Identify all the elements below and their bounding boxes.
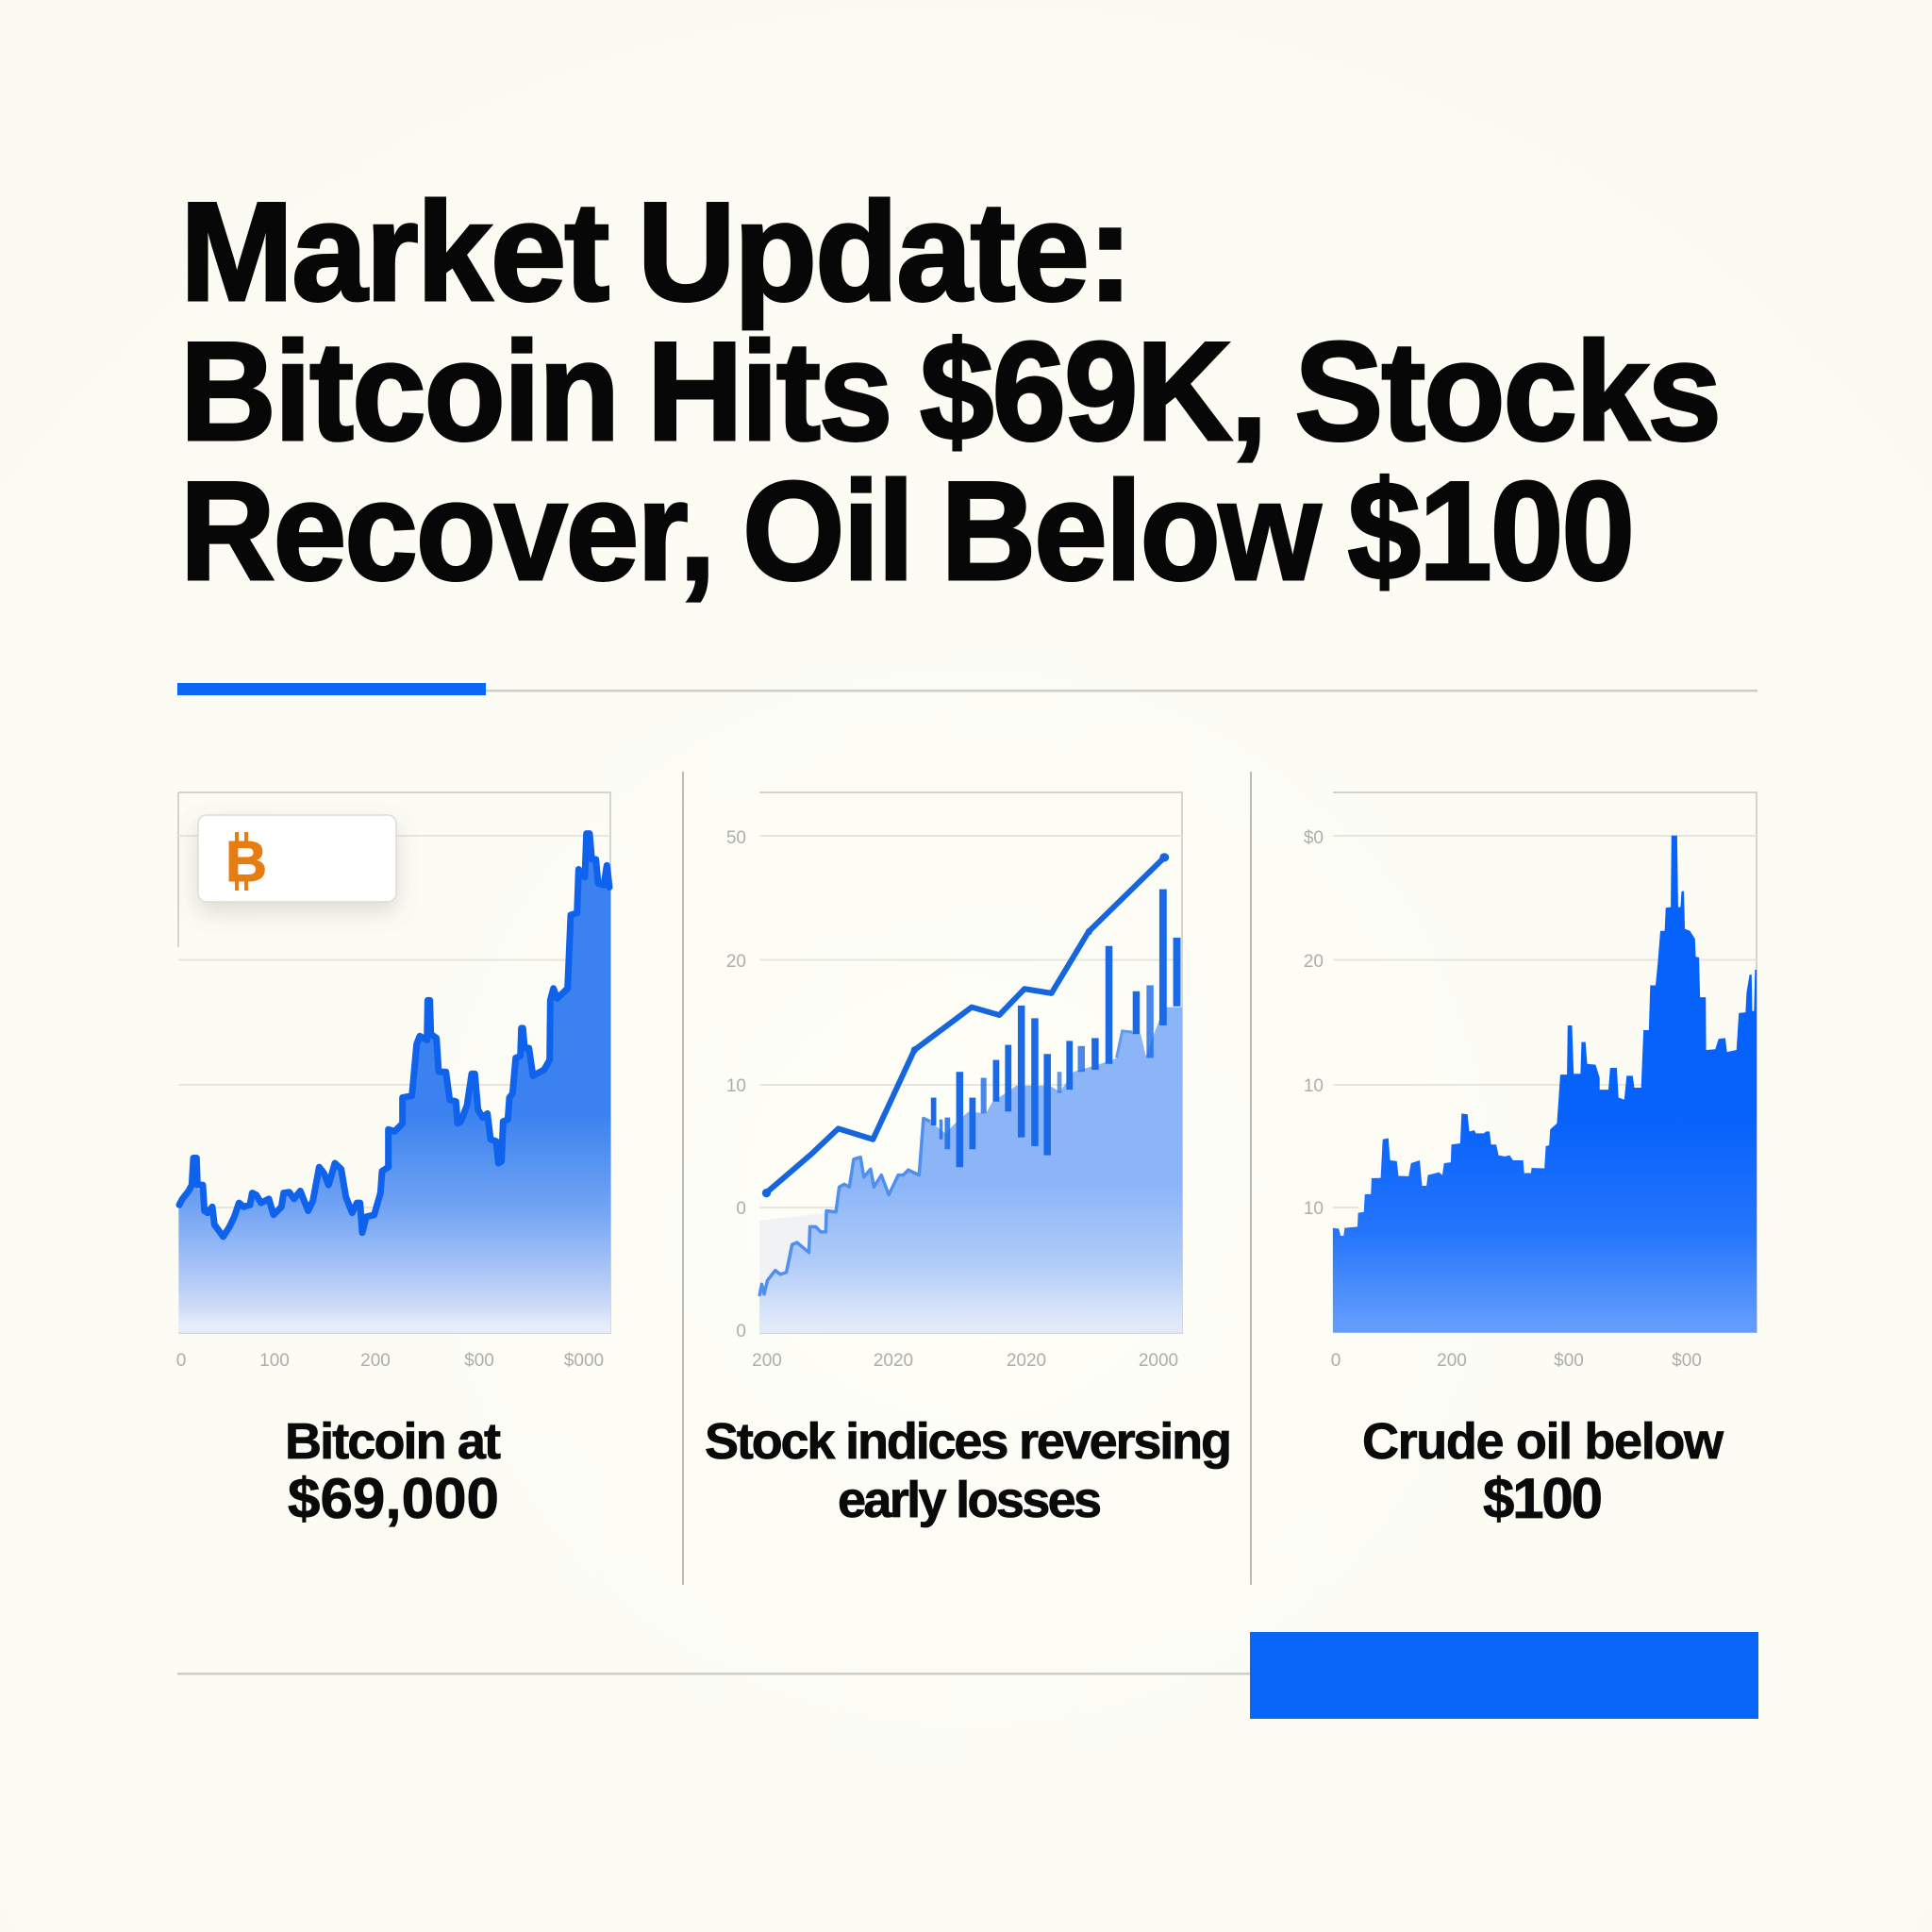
- x axis labels: bitcoin: $00: [464, 1351, 494, 1371]
- caption: oil: Crude oil below: [1362, 1413, 1724, 1470]
- y axis labels: stocks: 20: [726, 952, 746, 972]
- chart frame and grid: stocks: [759, 792, 1182, 1333]
- x axis labels: stocks: 2020: [874, 1351, 913, 1371]
- caption: bitcoin: Bitcoin at: [285, 1413, 501, 1470]
- title: Recover, Oil Below $100: [180, 452, 1633, 609]
- y axis labels: oil: 10: [1304, 1199, 1324, 1219]
- x axis labels: stocks: 200: [752, 1351, 782, 1371]
- y axis labels: oil: 10: [1304, 1076, 1324, 1096]
- area chart: bitcoin price: [178, 834, 610, 1333]
- panel: bitcoin chart: [176, 792, 610, 1530]
- trend line: stocks: [762, 853, 1169, 1197]
- x axis labels: bitcoin: [176, 1351, 604, 1371]
- top rule with blue accent: [177, 683, 1757, 695]
- x axis labels: oil: 200: [1437, 1351, 1467, 1371]
- x axis labels: stocks: 2000: [1139, 1351, 1178, 1371]
- y axis labels: oil: [1304, 828, 1324, 1219]
- x axis labels: bitcoin: 0: [176, 1351, 186, 1371]
- y axis labels: stocks: 0: [736, 1199, 746, 1219]
- title: [180, 173, 1720, 609]
- title: Bitcoin Hits $69K, Stocks: [180, 312, 1720, 470]
- panel: stock indices chart: [705, 792, 1232, 1528]
- caption: oil: [1362, 1413, 1724, 1530]
- y axis labels: oil: 20: [1304, 952, 1324, 972]
- y axis labels: stocks: 10: [726, 1076, 746, 1096]
- divider: [1250, 772, 1252, 1585]
- x axis labels: oil: [1331, 1351, 1702, 1371]
- panel: crude oil chart: [1304, 792, 1757, 1530]
- x axis labels: stocks: 2020: [1007, 1351, 1046, 1371]
- caption: stocks: [705, 1413, 1232, 1528]
- x axis labels: oil: $00: [1554, 1351, 1584, 1371]
- volume style spikes: stocks: [931, 890, 1180, 1167]
- divider: [682, 772, 684, 1585]
- x axis labels: oil: 0: [1331, 1351, 1341, 1371]
- chart frame and grid: bitcoin: [178, 792, 610, 1333]
- x axis labels: bitcoin: $000: [564, 1351, 604, 1371]
- caption: oil: $100: [1483, 1467, 1603, 1530]
- chart frame and grid: oil: [1333, 792, 1757, 1333]
- y axis labels: stocks: [726, 828, 746, 1341]
- x axis labels: oil: $00: [1672, 1351, 1702, 1371]
- x axis labels: bitcoin: 100: [259, 1351, 290, 1371]
- area chart: stock index: [759, 853, 1182, 1333]
- caption: bitcoin: $69,000: [288, 1467, 499, 1530]
- title: Market Update:: [180, 173, 1131, 330]
- caption: stocks: Stock indices reversing: [705, 1413, 1232, 1470]
- icon: bitcoin symbol: B: [225, 829, 267, 893]
- y axis labels: oil: $0: [1304, 828, 1324, 848]
- y axis labels: stocks: 50: [726, 828, 746, 848]
- x axis labels: bitcoin: 200: [360, 1351, 391, 1371]
- area chart: crude oil: [1333, 836, 1757, 1333]
- caption: bitcoin: [285, 1413, 501, 1530]
- y axis labels: stocks: 0: [736, 1322, 746, 1341]
- caption: stocks: early losses: [838, 1472, 1102, 1528]
- x axis labels: stocks: [752, 1351, 1178, 1371]
- bottom rule with blue block: [177, 1632, 1758, 1719]
- legend card with bitcoin icon: [198, 815, 396, 902]
